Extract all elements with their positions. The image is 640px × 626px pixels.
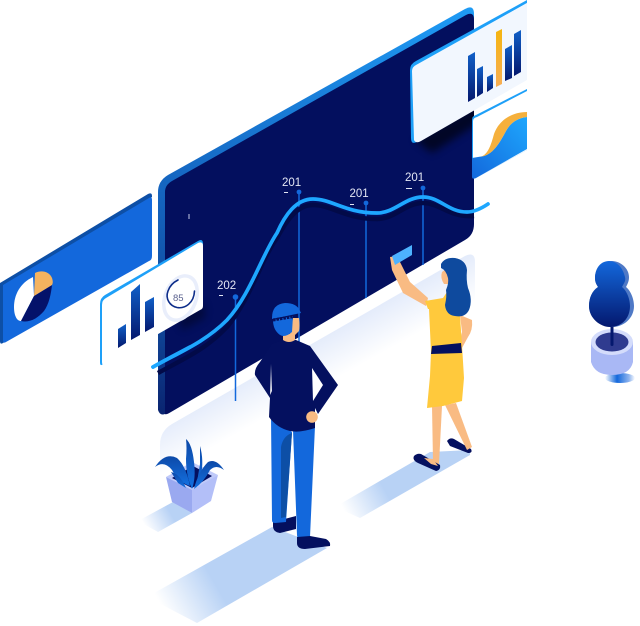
pot body <box>591 342 633 375</box>
bars <box>468 29 521 102</box>
neck <box>283 333 295 342</box>
chart: curve start over card <box>153 347 190 367</box>
cap band <box>273 316 297 320</box>
floor shadow: plant <box>138 502 192 532</box>
panel: top-right wave chart card <box>472 89 527 179</box>
panel: top-right bar chart card <box>410 0 527 143</box>
gauge: 85 <box>173 293 184 304</box>
pot left face <box>166 477 192 513</box>
face <box>290 318 300 336</box>
belt <box>431 343 462 354</box>
face <box>441 268 449 284</box>
legs <box>271 416 292 523</box>
chart: curve shadow <box>158 203 474 373</box>
dress <box>425 289 464 408</box>
icon: pie chart <box>14 271 53 321</box>
cap <box>272 303 301 319</box>
phone <box>392 245 412 265</box>
chart: year labels: 201 <box>405 172 424 184</box>
panel: white bar chart and gauge card <box>100 240 203 365</box>
small tick on board <box>188 214 190 219</box>
chart: year labels: 201 <box>282 177 301 189</box>
pot inside <box>172 466 212 488</box>
plant: right tree <box>589 261 635 383</box>
front shoe <box>297 536 330 549</box>
main dashboard board <box>158 7 480 414</box>
hand <box>306 411 318 423</box>
floor shadow: woman <box>335 450 470 518</box>
stem <box>610 325 614 346</box>
leaves <box>155 439 224 489</box>
canopy <box>589 261 634 327</box>
shadow of top-right card on board <box>178 103 480 330</box>
chart: year marker lines <box>233 186 425 401</box>
plant: left succulent <box>155 439 224 513</box>
pot rim <box>166 462 218 491</box>
soil <box>596 332 628 352</box>
figure: man <box>255 303 338 549</box>
chart: trend curve <box>153 197 488 367</box>
pot right face <box>192 475 218 513</box>
floor panel under the board <box>160 254 475 482</box>
tree shadow <box>605 373 635 383</box>
panel: blue pie chart card <box>0 193 152 344</box>
raised arm <box>390 256 428 306</box>
chart: year labels: 201 <box>350 188 369 200</box>
back leg <box>445 403 472 450</box>
back shoe <box>447 438 472 453</box>
front leg <box>432 406 442 464</box>
back shoe <box>273 516 296 533</box>
front shoe <box>414 454 440 471</box>
orange wave area <box>480 112 527 157</box>
chart: year labels <box>217 172 424 296</box>
arm gaps <box>270 364 272 395</box>
hair <box>441 258 471 316</box>
chart: year labels: 202 <box>217 280 236 292</box>
pot rim <box>591 329 633 355</box>
blue wave area <box>472 117 527 179</box>
floor shadow: man <box>147 527 327 623</box>
figure: woman <box>390 245 472 471</box>
hair <box>273 316 293 336</box>
back arm <box>459 315 472 348</box>
torso and arms <box>255 340 338 432</box>
bars <box>118 284 154 348</box>
